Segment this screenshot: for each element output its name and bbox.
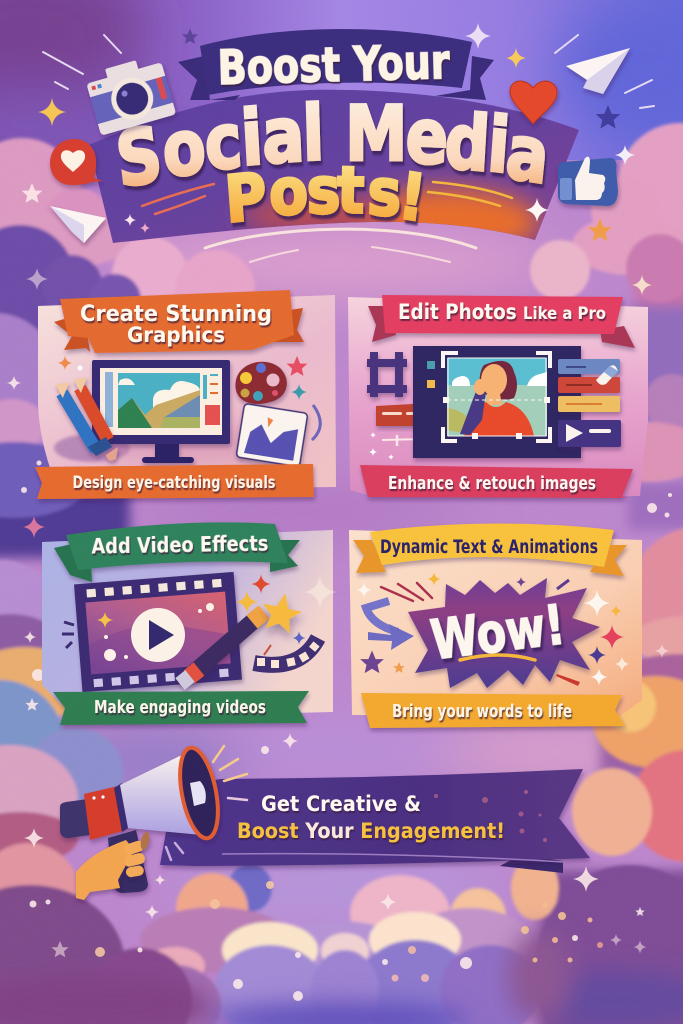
banner: Bring your words to life: Bring your words to life	[392, 702, 572, 722]
banner: Make engaging videos	[53, 691, 309, 725]
icon: speech bubble with heart	[50, 139, 103, 185]
icon: slider	[369, 432, 434, 460]
icon: pencils	[55, 377, 118, 461]
bottom clouds back	[228, 864, 272, 912]
heading: Create Stunning	[80, 302, 272, 327]
heading: Posts!: Posts!	[223, 154, 429, 238]
photo editor window	[413, 346, 581, 458]
icon: megaphone with hand	[60, 745, 247, 900]
decorative swooshes under title	[142, 182, 512, 262]
icon: arrow	[366, 601, 414, 650]
icon: magic wand	[180, 612, 264, 684]
text: Boost Your Engagement!: Boost Your Engagement!	[237, 819, 505, 843]
panel: Create Stunning Graphics	[35, 290, 336, 499]
crop frame	[443, 353, 550, 441]
horn	[120, 752, 212, 836]
banner: Enhance & retouch images: Enhance & retouch images	[388, 474, 596, 494]
icon: paper plane top right	[566, 48, 630, 94]
heading: Edit Photos Like a Pro	[398, 300, 606, 324]
top clouds left	[0, 138, 82, 258]
title banner: Boost Your	[178, 29, 494, 100]
icon: text tag	[376, 403, 434, 426]
tool layers	[558, 359, 621, 447]
icon: eraser	[596, 365, 618, 385]
back cap	[60, 799, 90, 838]
icon: film frame	[74, 572, 242, 692]
bottom cloud bodies	[214, 945, 326, 1024]
banner: Enhance & retouch images	[360, 465, 633, 498]
banner: title ribbon	[368, 295, 635, 348]
banner: Design eye-catching visuals	[35, 464, 314, 499]
banner: title ribbon: Graphics	[127, 323, 225, 347]
icon: camera	[84, 54, 176, 136]
decorative marks	[287, 356, 307, 376]
red band	[84, 786, 126, 840]
heading: Dynamic Text & Animations	[380, 537, 598, 558]
banner: Design eye-catching visuals: Design eye-catching visuals	[72, 473, 276, 493]
photo: woman	[447, 358, 547, 436]
icon: crop tool	[367, 352, 407, 397]
right column	[644, 374, 683, 430]
banner: title ribbon	[353, 523, 627, 576]
left column	[0, 313, 57, 437]
icon: play button	[131, 608, 185, 662]
icon: heart	[510, 81, 557, 124]
sound lines	[166, 746, 247, 860]
icon: star	[258, 589, 305, 635]
panel paper	[348, 297, 648, 496]
panel: Edit Photos Like a Pro	[348, 295, 648, 498]
banner: Bring your words to life	[361, 693, 625, 728]
soft colour fields	[0, 255, 683, 1024]
icon: monitor	[92, 360, 230, 463]
call to action ribbon	[160, 769, 590, 873]
panel: Dynamic Text & Animations	[349, 523, 642, 728]
cream cloud caps	[222, 922, 318, 978]
icon: photo card	[236, 403, 308, 467]
illustration: splatter	[54, 434, 130, 462]
plum corner clouds	[0, 885, 125, 1024]
underline swoosh	[460, 655, 535, 660]
banner: Make engaging videos: Make engaging videos	[94, 698, 266, 718]
top clouds right	[618, 123, 683, 247]
heading: Social Media: Social Media	[112, 89, 553, 205]
panel paper	[42, 530, 333, 718]
banner: title ribbon	[54, 522, 300, 582]
title ribbon: purple backdrop	[89, 90, 579, 256]
icon: palette	[235, 362, 287, 404]
text: Get Creative &: Get Creative &	[261, 792, 421, 816]
icon: paper plane left	[50, 206, 106, 243]
panel paper	[38, 295, 336, 490]
hand	[76, 831, 151, 900]
decorative stars around title	[38, 23, 654, 241]
bell	[174, 745, 224, 841]
decorative marks	[356, 572, 630, 686]
panel: Add Video Effects	[42, 522, 336, 725]
handle	[108, 830, 148, 893]
banner: title ribbon	[54, 290, 304, 353]
icon: curved film strip	[254, 638, 320, 668]
sparkles	[62, 574, 336, 655]
heading: Wow!: Wow!	[427, 593, 568, 672]
background star field	[7, 183, 672, 1001]
heading: Add Video Effects	[91, 531, 269, 559]
starburst	[408, 578, 600, 688]
panel paper	[349, 530, 642, 716]
heading: Boost Your: Boost Your	[217, 35, 451, 96]
icon: thumbs up	[558, 157, 618, 206]
